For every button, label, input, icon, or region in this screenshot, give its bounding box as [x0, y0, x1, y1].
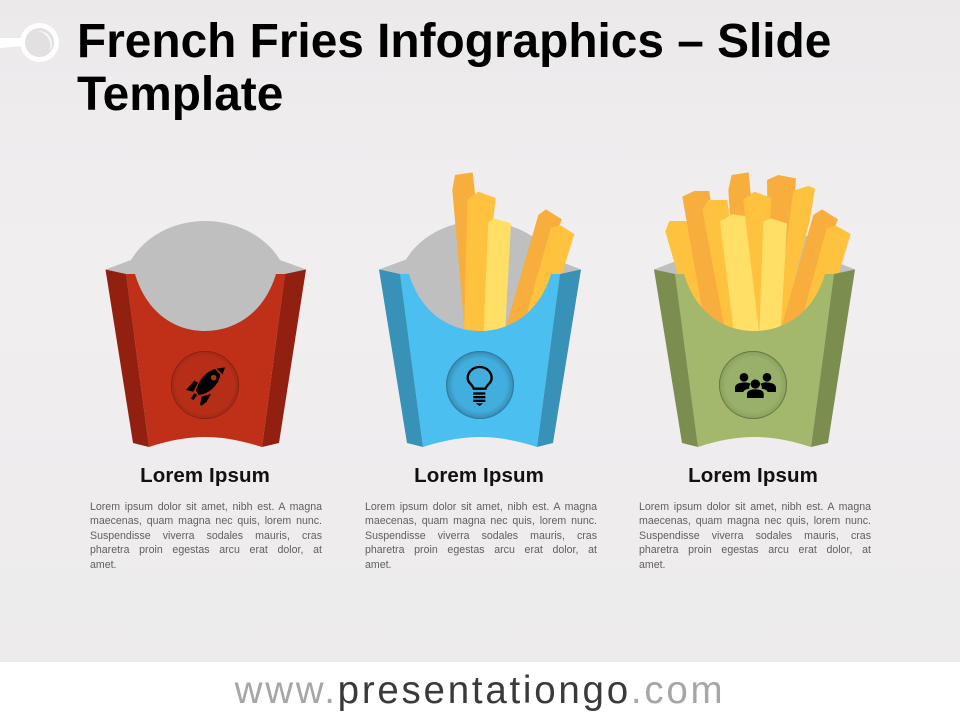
text block: column 3: Lorem ipsum dolor sit amet, nibh est. A magna	[639, 500, 871, 512]
text block: column 1: Suspendisse viverra sodales mauris, cras	[90, 530, 322, 542]
icon: pin ring	[0, 23, 59, 62]
text block: column 2	[365, 500, 597, 570]
panel: blue box with few fries	[379, 172, 581, 447]
box front	[400, 274, 560, 447]
text block: column 1: amet.	[90, 558, 116, 570]
icon badge: people	[719, 351, 787, 419]
icon badge: rocket	[171, 351, 239, 419]
text block: column 3: amet.	[639, 558, 666, 570]
title	[77, 15, 831, 121]
text block: column 3: maecenas, quam magna nec quis, lorem nunc.	[639, 515, 871, 527]
title: French Fries Infographics – Slide	[77, 15, 831, 68]
text block: column 2: Suspendisse viverra sodales mauris, cras	[365, 530, 597, 542]
text block: column 1: Lorem ipsum dolor sit amet, nibh est. A magna	[90, 500, 322, 512]
icon badge: light bulb	[446, 351, 514, 419]
fries	[665, 172, 851, 333]
box right side	[537, 270, 581, 447]
heading: column 2: Lorem Ipsum	[414, 464, 544, 487]
box back	[379, 221, 581, 335]
box back	[106, 221, 306, 335]
box front	[675, 274, 834, 447]
text block: column 3	[639, 500, 871, 570]
heading: column 1: Lorem Ipsum	[140, 464, 270, 487]
text block: column 3: pharetra proin egestas arcu erat dolor, at	[639, 544, 871, 556]
text block: column 1: maecenas, quam magna nec quis, lorem nunc.	[90, 515, 322, 527]
panel: green box full of fries	[654, 172, 855, 447]
box back	[654, 221, 855, 335]
box right side	[811, 270, 855, 447]
heading: column 3: Lorem Ipsum	[688, 464, 818, 487]
footer band	[0, 662, 960, 720]
text block: column 2: maecenas, quam magna nec quis, lorem nunc.	[365, 515, 597, 527]
text block: column 1	[90, 500, 322, 570]
text block: column 2: Lorem ipsum dolor sit amet, nibh est. A magna	[365, 500, 597, 512]
box left side	[379, 270, 423, 447]
fries	[452, 172, 574, 333]
panel: red empty box	[106, 221, 306, 447]
text block: column 1: pharetra proin egestas arcu erat dolor, at	[90, 544, 322, 556]
box front	[126, 274, 285, 447]
box right side	[262, 270, 306, 447]
text block: column 3: Suspendisse viverra sodales mauris, cras	[639, 530, 871, 542]
text block: column 2: pharetra proin egestas arcu erat dolor, at	[365, 544, 597, 556]
box left side	[654, 270, 698, 447]
footer url: www.presentationgo.com	[235, 669, 725, 712]
text block: column 2: amet.	[365, 558, 392, 570]
box left side	[106, 270, 149, 447]
title: Template	[77, 68, 283, 121]
